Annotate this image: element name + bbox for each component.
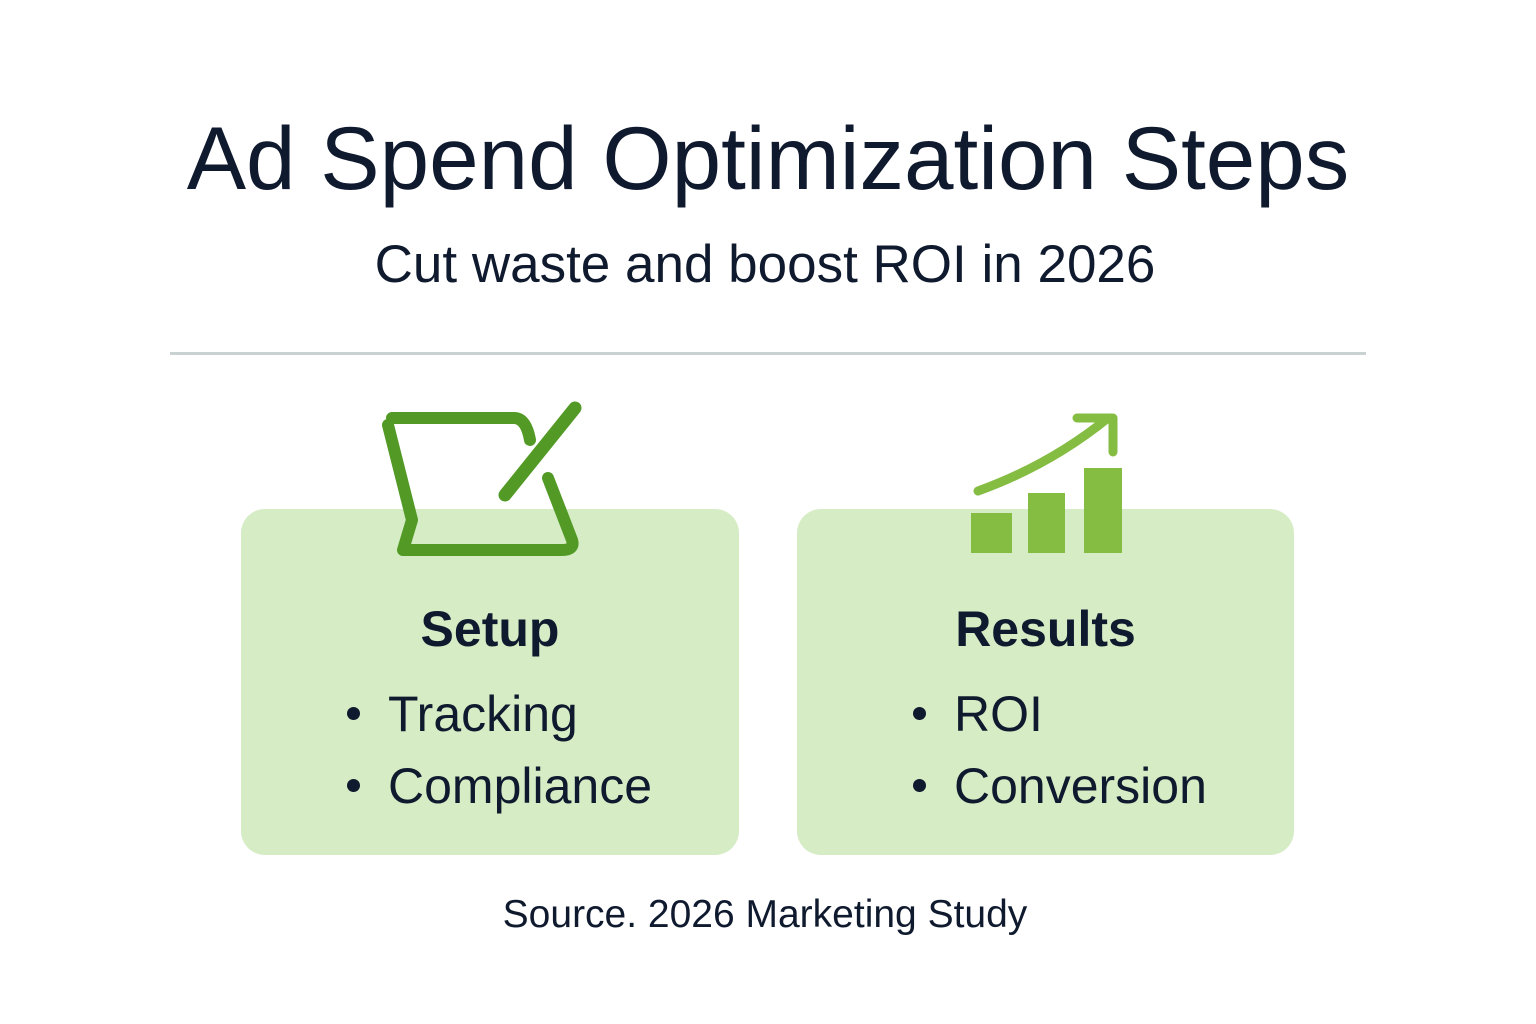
panel: results	[797, 509, 1294, 855]
list: setup items	[347, 686, 652, 814]
icon: rising bar chart	[971, 414, 1122, 553]
list: setup items: Compliance	[388, 758, 652, 814]
title: Ad Spend Optimization Steps	[187, 108, 1349, 208]
heading: setup: Setup	[421, 601, 559, 657]
list: results items	[913, 686, 1207, 814]
subtitle: Cut waste and boost ROI in 2026	[375, 235, 1155, 294]
list: results items: Conversion	[954, 758, 1207, 814]
source note: Source. 2026 Marketing Study	[503, 893, 1027, 936]
list: setup items: Tracking	[388, 686, 578, 742]
panel: setup	[241, 509, 739, 855]
list: results items: ROI	[954, 686, 1043, 742]
heading: results: Results	[955, 601, 1136, 657]
icon: tablet with pen	[382, 402, 582, 556]
